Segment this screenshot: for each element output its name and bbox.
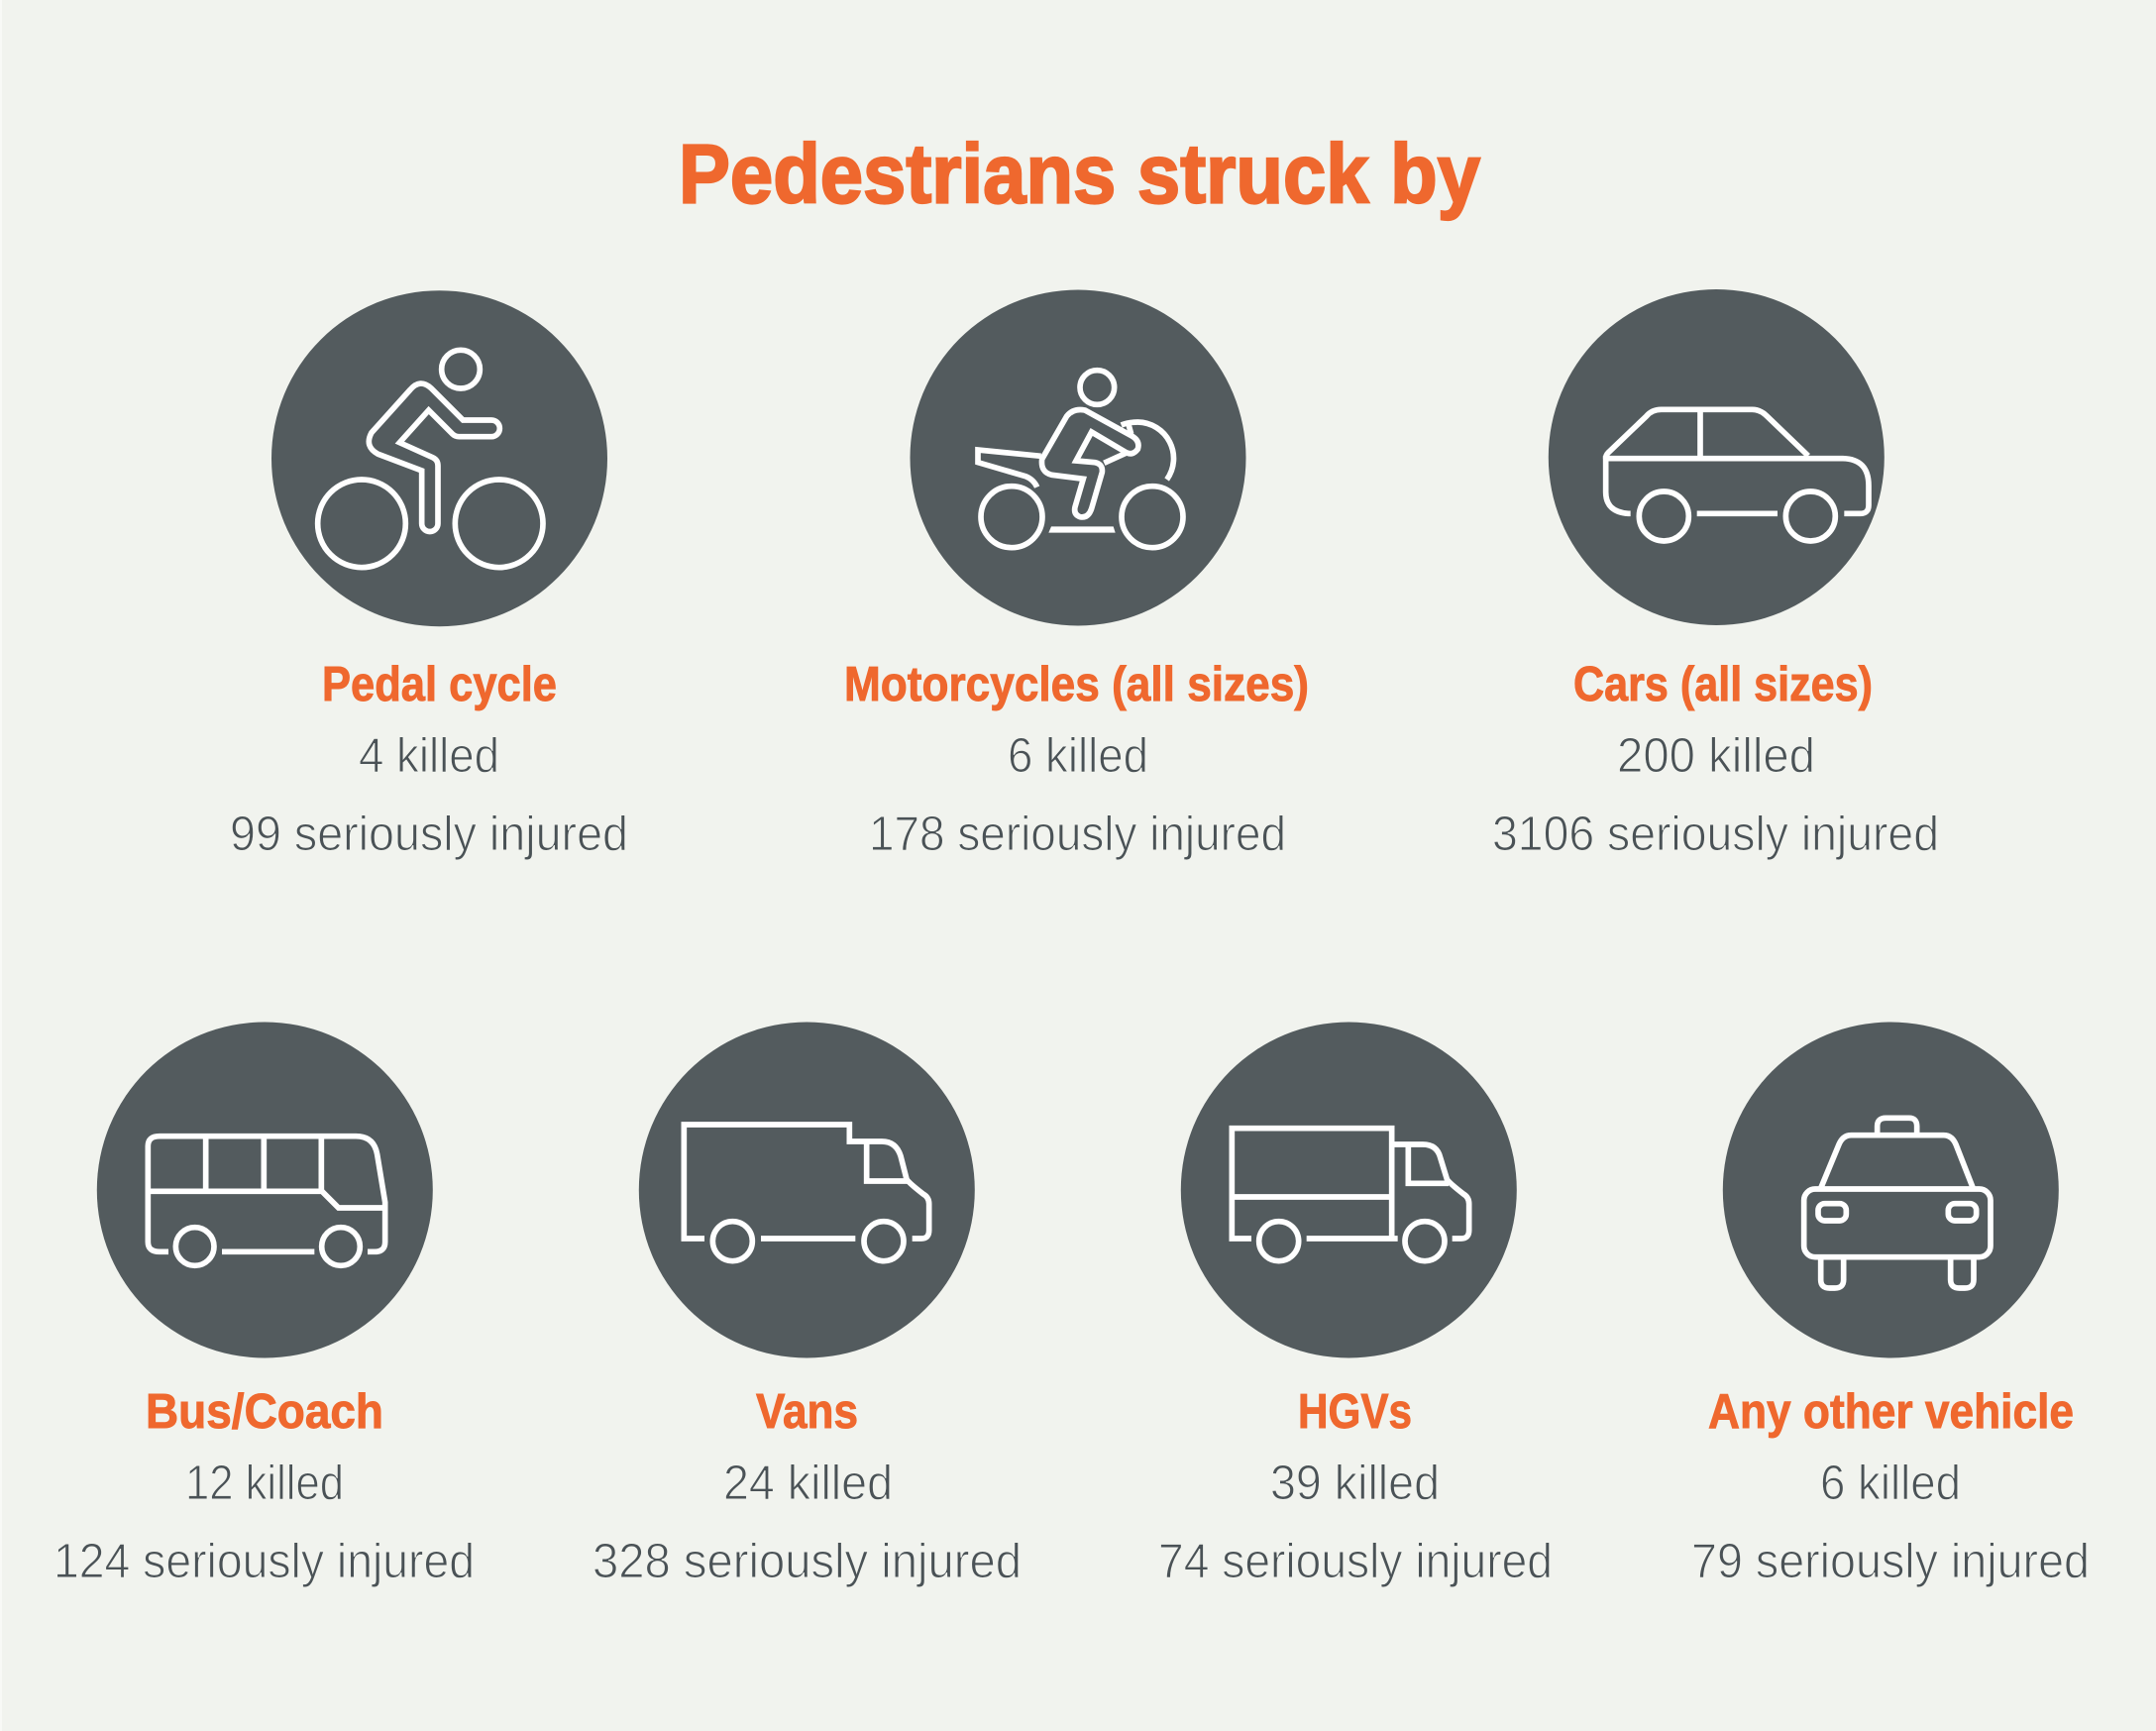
label: any other vehicle: Any other vehicle — [1708, 1385, 2074, 1439]
panel: pedal cycle — [230, 290, 628, 861]
icon: taxi — [1723, 1023, 2059, 1357]
icon: lorry — [1181, 1023, 1517, 1357]
stat: bus/coach seriously injured: 124 seriously injured — [54, 1535, 475, 1588]
icon: van — [639, 1023, 975, 1357]
label: motorcycles: Motorcycles (all sizes) — [844, 658, 1309, 711]
stat: HGVs seriously injured: 74 seriously injured — [1158, 1535, 1553, 1588]
panel: cars — [1492, 289, 1939, 861]
stat: pedal cycle seriously injured: 99 seriously injured — [230, 808, 628, 861]
label: vans: Vans — [756, 1385, 858, 1439]
stat: vans seriously injured: 328 seriously injured — [593, 1535, 1022, 1588]
panel: bus/coach — [54, 1023, 475, 1588]
panel: HGVs — [1158, 1023, 1553, 1588]
icon: motorcycle — [910, 289, 1246, 626]
stat: any other vehicle killed: 6 killed — [1820, 1457, 1961, 1510]
stat: vans killed: 24 killed — [723, 1457, 893, 1510]
panel: motorcycles — [844, 289, 1309, 861]
label: pedal cycle: Pedal cycle — [322, 658, 557, 711]
label: HGVs: HGVs — [1298, 1385, 1412, 1439]
panel: vans — [593, 1023, 1022, 1588]
stat: motorcycles killed: 6 killed — [1008, 729, 1148, 783]
title: Pedestrians struck by — [679, 127, 1480, 220]
panel: any other vehicle — [1691, 1023, 2090, 1588]
stat: any other vehicle seriously injured: 79 seriously injured — [1691, 1535, 2090, 1588]
stat: cars killed: 200 killed — [1617, 729, 1815, 783]
label: bus/coach: Bus/Coach — [146, 1385, 383, 1439]
icon: bus — [97, 1023, 433, 1357]
stat: motorcycles seriously injured: 178 seriously injured — [869, 808, 1286, 861]
icon: car — [1549, 289, 1885, 625]
stat: HGVs killed: 39 killed — [1270, 1457, 1440, 1510]
stat: bus/coach killed: 12 killed — [185, 1457, 344, 1510]
icon: pedal cycle — [271, 290, 607, 626]
label: cars: Cars (all sizes) — [1573, 658, 1873, 711]
stat: pedal cycle killed: 4 killed — [359, 729, 499, 783]
stat: cars seriously injured: 3106 seriously injured — [1492, 808, 1939, 861]
